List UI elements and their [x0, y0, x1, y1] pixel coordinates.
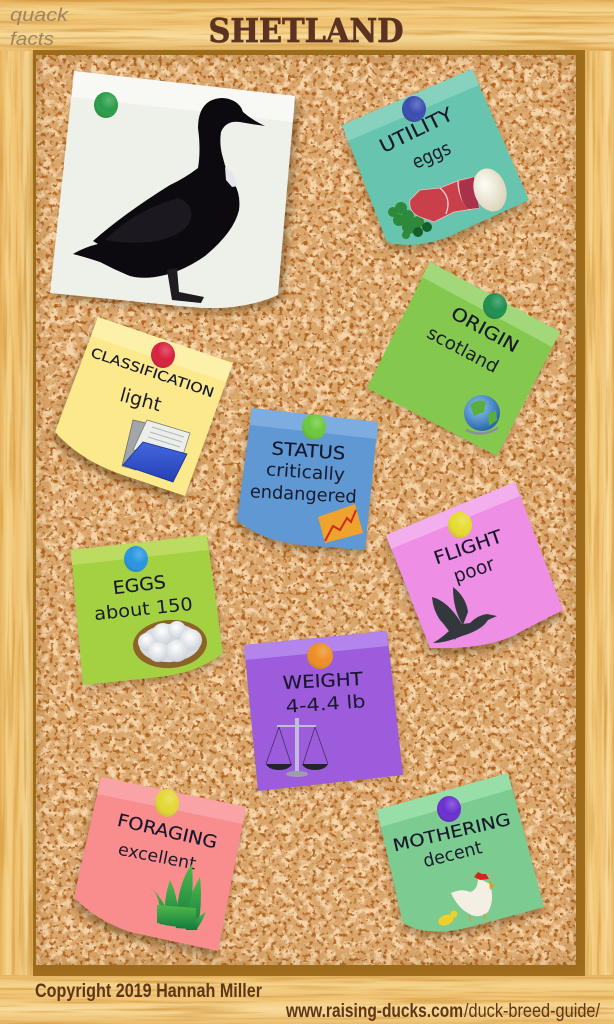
text: utility eggs	[376, 103, 457, 174]
brand: quack facts: quack	[10, 5, 69, 25]
icon: balance scale	[266, 718, 328, 777]
note: foraging	[72, 777, 246, 958]
icon: pin	[94, 92, 118, 118]
icon: rising chart	[318, 504, 363, 543]
text: weight value: WEIGHT	[282, 669, 364, 694]
source url: www.raising-ducks.com	[285, 1001, 463, 1022]
text: origin scotland: ORIGIN	[447, 303, 522, 357]
icon: pin	[307, 643, 333, 669]
source url	[285, 1001, 601, 1022]
note: status	[235, 408, 378, 556]
text: foraging excellent: excellent	[116, 840, 198, 875]
text: eggs about 150	[93, 572, 194, 625]
icon: nest with eggs	[131, 617, 209, 671]
note: flight	[386, 482, 563, 655]
brand: quack facts: facts	[10, 29, 54, 49]
icon: pin	[302, 414, 326, 440]
cork board	[36, 55, 576, 965]
text: weight value	[282, 669, 366, 718]
icon: pin	[448, 512, 472, 538]
brand: quack facts	[10, 5, 69, 49]
icon: meat, egg and parsley	[388, 164, 512, 239]
icon: pin	[483, 293, 507, 319]
text: mothering decent: MOTHERING	[391, 810, 513, 856]
text: mothering decent	[391, 810, 513, 872]
icon: pin	[151, 342, 175, 368]
text: status critically endangered: STATUS	[271, 438, 346, 465]
text: utility eggs: eggs	[409, 137, 454, 174]
icon: flying duck	[432, 587, 497, 643]
note: weight	[244, 631, 404, 794]
copyright: Copyright 2019 Hannah Miller	[35, 981, 263, 1002]
text: flight poor: FLIGHT	[431, 526, 506, 569]
text: origin scotland: scotland	[423, 323, 502, 378]
text: eggs about 150: about 150	[93, 594, 194, 625]
text: mothering decent: decent	[421, 837, 484, 872]
text: status critically endangered: endangered	[249, 481, 357, 508]
icon: pin	[155, 789, 179, 817]
note: origin	[367, 262, 560, 460]
title: SHETLAND	[208, 11, 404, 50]
icon: grass	[152, 864, 206, 930]
note: duck photo	[50, 71, 300, 313]
text: foraging excellent	[115, 811, 219, 875]
text: flight poor	[431, 526, 506, 588]
text: eggs about 150: EGGS	[112, 572, 167, 599]
text: classification light: CLASSIFICATION	[89, 345, 216, 401]
note: classification	[52, 317, 233, 503]
text: status critically endangered	[249, 438, 357, 508]
note: eggs	[71, 535, 225, 690]
text: status critically endangered: critically	[265, 459, 346, 486]
note: utility	[342, 69, 529, 251]
icon: folder	[122, 420, 190, 482]
text: utility eggs: UTILITY	[376, 103, 457, 158]
icon: pin	[437, 796, 461, 822]
text: classification light	[89, 345, 216, 416]
text: classification light: light	[117, 384, 164, 416]
icon: pin	[124, 546, 148, 572]
icon: pin	[402, 96, 426, 122]
text: origin scotland	[423, 303, 522, 378]
icon: globe	[464, 395, 500, 434]
text: flight poor: poor	[451, 553, 498, 588]
text: foraging excellent: FORAGING	[115, 811, 219, 853]
text: weight value: 4-4.4 lb	[285, 691, 366, 718]
note: mothering	[377, 773, 544, 938]
icon: hen and chick	[437, 872, 494, 927]
duck silhouette	[73, 98, 265, 303]
